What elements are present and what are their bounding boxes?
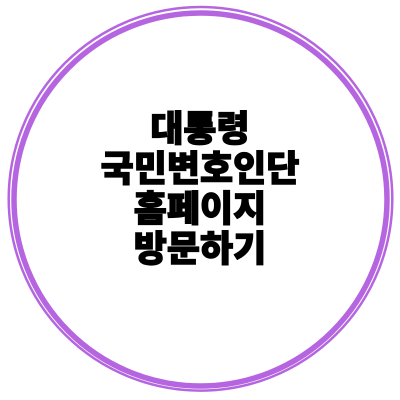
- title: [101, 108, 300, 269]
- title: 대통령: [150, 108, 250, 149]
- title: 방문하기: [134, 228, 266, 269]
- title: 국민변호인단: [101, 148, 299, 189]
- title: 홈페이지: [134, 188, 266, 229]
